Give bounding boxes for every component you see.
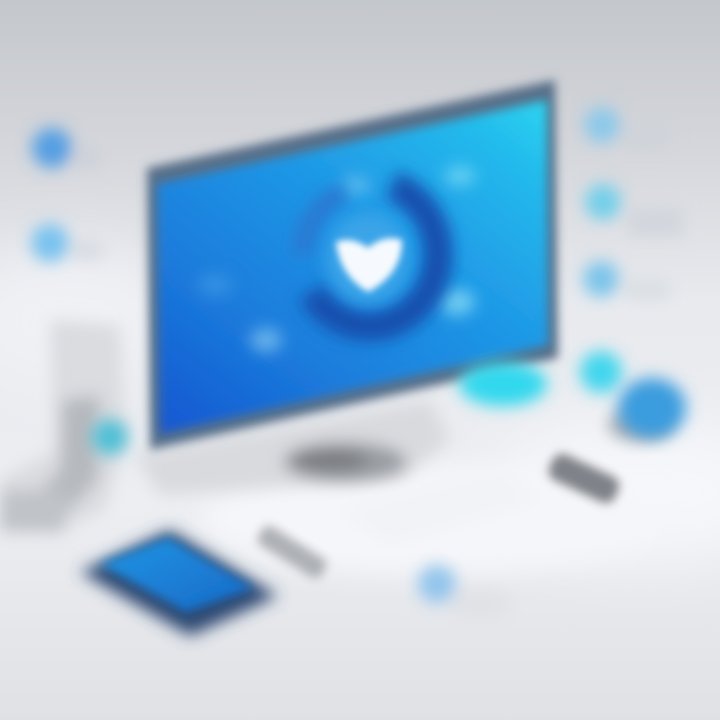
- screen soft highlights: [197, 167, 475, 352]
- white floor shadow under the monitor: [200, 465, 660, 575]
- monitor screen: [157, 100, 548, 434]
- lower screen cyan glow: [459, 362, 547, 406]
- monitor stand and base: [135, 400, 450, 495]
- white keyboard panel: [340, 470, 540, 545]
- right floating icons: [583, 107, 683, 300]
- monitor frame: [147, 80, 558, 450]
- left cyan dot: [92, 419, 128, 455]
- small gray device right: [545, 451, 622, 506]
- keyboard bar: [255, 523, 329, 581]
- cyan orb and blue sphere: [580, 351, 686, 441]
- left floating icons: [31, 128, 106, 262]
- left white device stack: [0, 320, 125, 535]
- tablet: [80, 530, 278, 636]
- shield ring icon: [302, 186, 438, 326]
- bottom floating icon: [418, 565, 512, 621]
